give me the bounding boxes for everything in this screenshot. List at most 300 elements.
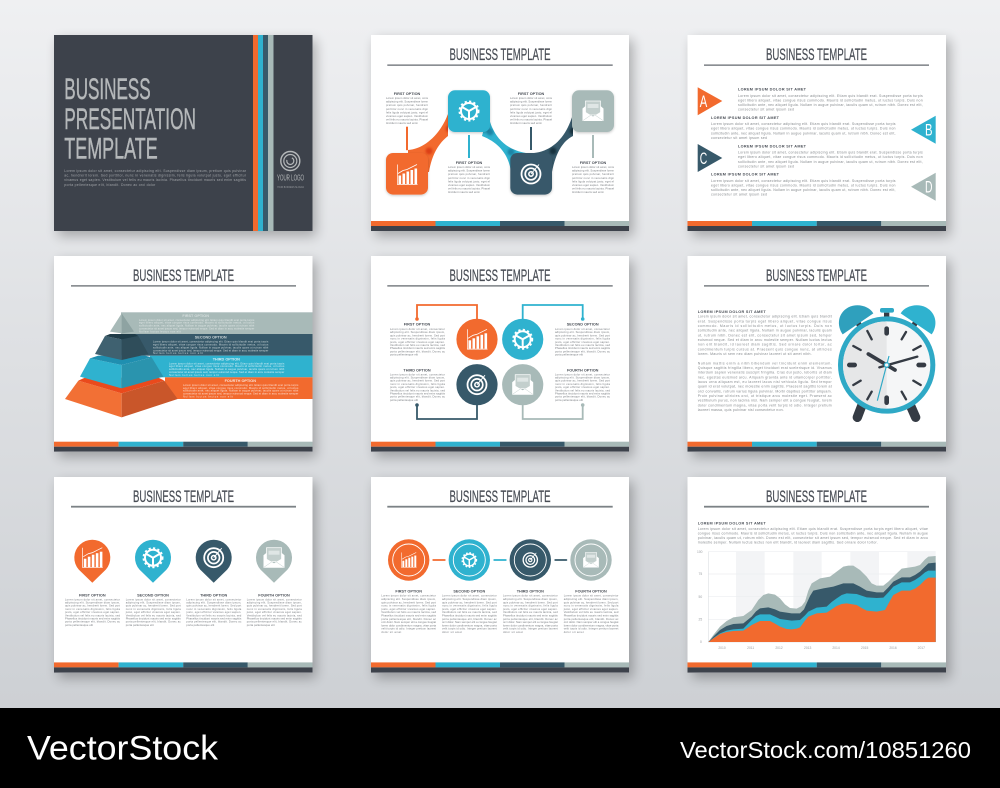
text block: commodo. Mauris id sollicitudin metus, ut luctus turpis. Duis non: [698, 324, 832, 328]
text: option 2: [448, 161, 491, 194]
text: fourth option: eget libero aliquet, vitae congue risus commodo. Mauris id sollicitudin metus, ut luctus: [183, 386, 299, 390]
footer bar: [54, 662, 312, 673]
text: second option: SECOND OPTION: [453, 590, 485, 594]
text block A: Lorem ipsum dolor sit amet, consectetur adipiscing elit. Etiam quis blandit erat. Suspendisse porta turpis: [738, 94, 923, 98]
area chart: [697, 550, 936, 650]
text: fourth option: quis pulvinar ac, hendrerit lorem. Sed port: [555, 379, 610, 383]
text block: vestibulum purus, non lacinia nisi. Nam semper elit a congue feugiat, lorem: [698, 399, 832, 403]
text: first option: sollicitudin ante, nec aliquet ligula. Nullam in augue pulvinar, iaculis quam ut rutrum nibh: [139, 324, 255, 328]
text: second option: Lorem ipsum dolor sit amet, consectetur: [442, 594, 497, 598]
text: third option: Vestibulum vel felis eu mauris lacinia, sed: [390, 388, 446, 392]
text: second option: SECOND OPTION: [137, 594, 169, 598]
text block: ut, rutrum nibh. Donec est elit, consectetur sit amet ipsum sed, tempor: [698, 333, 833, 337]
text block: Quisque sagittis fringilla libero, eget tincidunt erat scelerisque id. Vivamus: [698, 366, 832, 370]
text: third option: adipiscing elit. Suspendisse diam ipsum,: [503, 597, 558, 601]
text: fourth option: Lorem ipsum dolor sit amet, consectetur: [247, 597, 302, 601]
text: second option: dolor sit amet: [442, 630, 462, 634]
text: option 3: tincidunt mauris sed enim: [510, 121, 543, 125]
text: fourth option: justo, eget efficitur vivamus eget sapien.: [246, 610, 302, 614]
text: third option: justo, eget efficitur vivamus eget sapien.: [502, 607, 558, 611]
chart axis labels: 25: [698, 618, 702, 622]
text: first option: nunc in venenatis dignissim, felis ligula: [381, 604, 436, 608]
text: third option: orci dolor. Nam semper elit a congue feugiat: [503, 620, 558, 624]
heading: BUSINESS TEMPLATE: [766, 45, 867, 64]
text: fourth option: porta pellentesque elit, blandit. Donec ac: [564, 617, 619, 621]
text: second option: SECOND OPTION: [195, 336, 227, 340]
text: option 2: adipiscing elit. Suspendisse lorem: [448, 169, 491, 173]
text: first option: FIRST OPTION: [79, 594, 106, 598]
chart axis labels: 2013: [804, 646, 812, 650]
text: first option: quis pulvinar ac, hendrerit lorem. Sed port: [65, 604, 120, 608]
text: third option: nunc in venenatis dignissim, felis ligula: [390, 382, 446, 386]
text: fourth option: [246, 594, 302, 627]
text: first option: Phasellus tincidunt mauris sed enim sagittis: [65, 616, 121, 620]
text: option 1: Lorem ipsum dolor sit amet, cons: [386, 96, 429, 100]
text block: lacus urna aliquam est, eu laoreet lacus nisl vehicula ligula. Sed tempor: [698, 380, 833, 384]
logo text: [277, 172, 304, 189]
text block C: sollicitudin ante, nec aliquet ligula. Nullam in augue pulvinar, iaculis quam ut, rutrum nibh. Donec est elit,: [738, 160, 923, 164]
panel: ABCD list slide: [688, 35, 946, 231]
text: first option: Phasellus tincidunt mauris sed enim sagittis: [381, 614, 437, 618]
cover title: PRESENTATION: [64, 103, 196, 136]
footer bar: [688, 221, 946, 231]
text: fourth option: FOURTH OPTION: [225, 379, 256, 383]
text: first option: [380, 590, 437, 634]
logo text: YOUR BUSINESS SLOGAN: [277, 185, 304, 189]
text: first option: FIRST OPTION: [404, 323, 431, 327]
text: fourth option: sollicitudin ante, nec aliquet ligula. Nullam in augue pulvinar, iaculis quam ut rutrum nibh: [183, 389, 299, 393]
text: second option: nunc in venenatis dignissim, felis ligula: [126, 607, 181, 611]
text: second option: nunc in venenatis dignissim, felis ligula: [555, 337, 610, 341]
text: first option: velit turpis id odio. Integer pretium laoreet: [381, 627, 436, 631]
panel: timeline circles slide: [371, 477, 629, 673]
text: fourth option: porta pellentesque elit, blandit. Donec ac: [555, 395, 611, 399]
marker B: B: [925, 122, 932, 140]
text: fourth option: adipiscing elit. Suspendisse diam ipsum,: [247, 600, 302, 604]
text: first option: justo, eget efficitur vivamus eget sapien.: [64, 610, 120, 614]
text: third option: consectetur sit amet ipsum sed, tempor euismod neque. Sed et diam in arcu molestie semper: [169, 370, 284, 374]
text block: sollicitudin ante, nec aliquet ligula. Nullam in augue pulvinar, iaculis quam: [698, 329, 832, 333]
timeline connectors: [432, 559, 567, 561]
text: fourth option: porta pellentesque elit: [555, 398, 583, 402]
footer bar: [688, 442, 946, 452]
text block B: [711, 116, 896, 140]
text: option 2: vel felis eu mauris lacinia. Phasel: [448, 187, 490, 191]
text block: pulvinar, iaculis quam ut, rutrum nibh. Donec est elit, consectetur sit amet ipsum sed, tempor euismod neque. Sed et diam in arcu: [698, 536, 928, 540]
text: first option: adipiscing elit. Suspendisse diam ipsum,: [65, 600, 120, 604]
text: third option: THIRD OPTION: [200, 594, 228, 598]
text: fourth option: dolor sit amet: [564, 630, 584, 634]
text: second option: porta pellentesque elit: [555, 353, 583, 357]
text block: lorem. Mauris ut sem nec diam pulvinar laoreet ut sit amet nibh.: [698, 352, 812, 356]
text block: dolor condimentum magna, vitae porta velit turpis id odio. Integer pretium: [698, 403, 832, 407]
text: third option: [185, 594, 242, 627]
marker B: [911, 116, 936, 144]
text block: erat. Suspendisse porta turpis eget libero aliquet, vitae congue risus: [698, 319, 832, 323]
heading: BUSINESS TEMPLATE: [766, 487, 867, 506]
text: option 4: felis ligula volutpat justo, eget ef: [572, 179, 614, 183]
text: third option: Lorem ipsum dolor sit amet, consectetur adipiscing elit. Etiam quis blandit erat porta turpis: [169, 361, 285, 365]
text block A: LOREM IPSUM DOLOR SIT AMET: [738, 87, 807, 91]
text: fourth option: [563, 590, 619, 634]
text: fourth option: FOURTH OPTION: [575, 590, 607, 594]
footer bar: [371, 221, 629, 231]
text: third option: lorem dolor condimentum magna, vitae porta: [503, 623, 558, 627]
marker D: D: [925, 179, 933, 197]
text: second option: quis pulvinar ac, hendrerit lorem. Sed port: [126, 604, 181, 608]
text: third option: [502, 590, 558, 634]
text: second option: adipiscing elit. Suspendisse diam ipsum,: [126, 600, 181, 604]
chart axis labels: 75: [698, 572, 702, 576]
text: third option: [169, 357, 285, 377]
text: first option: nunc in venenatis dignissim, felis ligula: [65, 607, 120, 611]
text: third option: porta pellentesque elit: [186, 623, 215, 627]
text: third option: eget libero aliquet, vitae congue risus commodo. Mauris id sollicitudin metus, ut luctus: [169, 364, 285, 368]
text: option 3: vel felis eu mauris lacinia. Phasel: [510, 118, 552, 122]
footer bar: [688, 662, 946, 673]
text block B: Lorem ipsum dolor sit amet, consectetur adipiscing elit. Etiam quis blandit erat. Suspendisse porta turpis: [711, 122, 896, 126]
chart axis labels: 50: [698, 595, 702, 599]
icon pins: [74, 540, 292, 583]
text block: laoreet massa, quis pulvinar nisl consectetur non.: [698, 408, 784, 412]
option bands: [121, 312, 312, 399]
text: option 1: adipiscing elit. Suspendisse lorem: [386, 100, 429, 104]
text: third option: adipiscing elit. Suspendisse diam ipsum,: [186, 600, 242, 604]
cover title: TEMPLATE: [64, 132, 158, 165]
text: third option: quis pulvinar ac, hendrerit lorem. Sed port: [503, 600, 558, 604]
icon circles: [456, 319, 543, 405]
text: fourth option: porta pellentesque elit: [247, 623, 275, 627]
text: first option: porta pellentesque elit: [390, 353, 418, 357]
text block: orci convallis, rutrum varius ligula pulvinar. Morbi dapibus porttitor aliquam.: [698, 389, 832, 393]
chart axis labels: 0: [700, 640, 702, 644]
text: first option: adipiscing elit. Suspendisse diam ipsum,: [390, 330, 445, 334]
text: first option: Vestibulum vel felis eu mauris lacinia, sed: [390, 343, 446, 347]
text block C: Lorem ipsum dolor sit amet, consectetur adipiscing elit. Etiam quis blandit erat. Suspendisse porta turpis: [738, 150, 923, 154]
text: second option: eget libero aliquet, vitae congue risus commodo. Mauris id sollicitudin metus, ut luctus: [153, 342, 269, 346]
text: second option: nunc in venenatis dignissim, felis ligula: [442, 604, 497, 608]
text: fourth option: [183, 379, 299, 398]
text: fourth option: porta pellentesque elit, blandit. Donec ac: [247, 620, 302, 624]
text: option 3: FIRST OPTION: [518, 92, 545, 96]
text: option 3: Lorem ipsum dolor sit amet, cons: [510, 96, 553, 100]
text: option 1: vivamus eget sapien. Vestibulum: [386, 114, 429, 118]
panel: cover slide: [54, 35, 312, 231]
text block C: consectetur sit amet ipsum sed: [738, 164, 794, 168]
panel: curved process slide: [371, 35, 629, 231]
text: fourth option: [554, 368, 611, 402]
chart axis labels: 100: [697, 550, 703, 554]
text: third option: THIRD OPTION: [213, 357, 240, 361]
text: option 3: [510, 92, 553, 125]
text block B: sollicitudin ante, nec aliquet ligula. Nullam in augue pulvinar, iaculis quam ut, rutrum nibh. Donec est elit,: [711, 131, 896, 135]
cover title: BUSINESS: [64, 73, 151, 106]
text block: euismod neque. Sed et diam in arcu molestie semper. Nullam luctus lectus: [698, 338, 832, 342]
text: first option: FIRST OPTION: [182, 314, 209, 318]
text: option 4: vel felis eu mauris lacinia. Phasel: [572, 187, 614, 191]
text: third option: THIRD OPTION: [517, 590, 544, 594]
text block B: consectetur sit amet ipsum sed: [711, 136, 767, 140]
text: second option: porta pellentesque elit: [126, 623, 154, 627]
pyramid: [65, 313, 178, 417]
text: first option: FIRST OPTION: [395, 590, 422, 594]
text: second option: Lorem ipsum dolor sit amet, consectetur: [126, 597, 181, 601]
text: fourth option: Phasellus tincidunt mauris sed enim sagittis: [247, 616, 302, 620]
text: option 4: FIRST OPTION: [580, 161, 607, 165]
text block D: sollicitudin ante, nec aliquet ligula. Nullam in augue pulvinar, iaculis quam ut, rutrum nibh. Donec est elit,: [711, 188, 896, 192]
text: third option: porta pellentesque elit, blandit. Donec ac: [390, 395, 446, 399]
text block B: eget libero aliquet, vitae congue risus commodo. Mauris id sollicitudin metus, ut luctus turpis. Duis non: [711, 127, 896, 131]
text: third option: Vestibulum vel felis eu mauris lacinia, sed: [186, 613, 242, 617]
text: fourth option: Lorem ipsum dolor sit amet, consectetur: [564, 594, 618, 598]
text block: condimentum turpis cursus at. Praesent quis congue nunc, at ultricies: [698, 347, 832, 351]
heading: BUSINESS TEMPLATE: [450, 266, 550, 285]
text block: non elit blandit, id laoreet diam sagittis. Sed ornare dolor tortor, ac: [698, 343, 832, 347]
text: option 2: porttitor nunc in venenatis dign: [448, 176, 490, 180]
text: option 4: porttitor nunc in venenatis dign: [572, 176, 614, 180]
cover body text: [64, 169, 247, 187]
text block A: [738, 87, 923, 112]
text: third option: quis pulvinar ac, hendrerit lorem. Sed port: [186, 604, 242, 608]
text: fourth option: Vestibulum vel felis eu mauris lacinia, sed: [564, 610, 619, 614]
cover body text: Lorem ipsum dolor sit amet, consectetur adipiscing elit. Suspendisse diam ipsum, pretium quis pulvinar: [64, 169, 247, 173]
text block D: [711, 173, 896, 197]
text: third option: dolor sit amet: [503, 630, 523, 634]
text: fourth option: Phasellus tincidunt mauris sed enim sagittis: [564, 614, 619, 618]
chart axis labels: 2017: [918, 646, 925, 650]
text block: quam id erat volutpat, nec molestie enim sagittis. Praesent sagittis lorem at: [698, 385, 832, 389]
text: second option: consectetur sit amet ipsum sed, tempor euismod neque. Sed et diam in arcu molestie semper: [153, 348, 268, 352]
text: second option: Vestibulum vel felis eu mauris lacinia, sed: [126, 613, 181, 617]
text: first option: quis pulvinar ac, hendrerit lorem. Sed port: [390, 333, 445, 337]
tiles with icons: [386, 90, 614, 195]
chart axis labels: 2012: [775, 646, 783, 650]
marker A: A: [700, 93, 707, 111]
text: option 3: felis ligula volutpat justo, eget ef: [510, 110, 552, 114]
text: third option: THIRD OPTION: [403, 368, 431, 372]
panel: four circles slide: [371, 256, 629, 452]
cover body text: vivamus eget sapien. Vestibulum vel felis eu mauris lacinia. Phasellus tincidunt mauris sed enim sagittis: [64, 178, 246, 182]
footer bar: [371, 442, 629, 452]
text: fourth option: nunc in venenatis dignissim, felis ligula: [247, 607, 302, 611]
text: fourth option: FOURTH OPTION: [258, 594, 290, 598]
text block: congue risus commodo. Mauris id sollicitudin metus, ut luctus turpis. Duis non sollicitudin ante, nec aliquet ligula. Nullam in augue: [698, 531, 928, 535]
text: option 4: tincidunt mauris sed enim: [572, 190, 605, 194]
text: third option: porta pellentesque elit: [390, 398, 418, 402]
colour stripes: [253, 35, 274, 231]
text block: interdum sapien venenatis suscipit fringilla. Cras dui justo, lobortis ut diam: [698, 371, 832, 375]
text: second option: justo, eget efficitur vivamus eget sapien.: [441, 607, 497, 611]
text: first option: adipiscing elit. Suspendisse diam ipsum,: [381, 597, 436, 601]
panel: map pins slide: [54, 477, 312, 673]
text: first option: Lorem ipsum dolor sit amet, consectetur: [65, 597, 120, 601]
text block C: LOREM IPSUM DOLOR SIT AMET: [738, 144, 807, 148]
text block A: consectetur sit amet ipsum sed: [738, 108, 794, 112]
text: fourth option: consectetur sit amet ipsum sed, tempor euismod neque. Sed et diam in arcu molestie semper: [183, 392, 298, 396]
marker D: [911, 173, 936, 201]
text: option 3: adipiscing elit. Suspendisse lorem: [510, 100, 553, 104]
text: fourth option: Lorem ipsum dolor sit amet, consectetur: [555, 372, 610, 376]
text block: Lorem ipsum dolor sit amet, consectetur adipiscing elit. Etiam quis blandit erat. Suspendisse porta turpis eget libero aliquet, vitae: [698, 527, 928, 531]
panel: pyramid slide: [54, 256, 312, 452]
text: first option: [64, 594, 121, 627]
text: fourth option: adipiscing elit. Suspendisse diam ipsum,: [555, 376, 610, 380]
text: third option: justo, eget efficitur vivamus eget sapien.: [185, 610, 242, 614]
text: first option: justo, eget efficitur vivamus eget sapien.: [389, 340, 445, 344]
text: fourth option: quis pulvinar ac, hendrerit lorem. Sed port: [247, 604, 302, 608]
text block: molestie semper. Nullam luctus lectus non elit blandit, id laoreet diam sagittis. Sed ornare dolor tortor.: [698, 541, 878, 545]
heading: BUSINESS TEMPLATE: [450, 45, 550, 64]
text: third option: porta pellentesque elit, blandit. Donec ac: [186, 620, 242, 624]
text: first option: porta pellentesque elit, blandit. Donec ac: [390, 349, 446, 353]
text: second option: Lorem ipsum dolor sit amet, consectetur adipiscing elit. Etiam quis blandit erat porta turpis: [153, 340, 269, 344]
text: option 4: vivamus eget sapien. Vestibulum: [572, 183, 615, 187]
text: first option: porta pellentesque elit, blandit. Donec ac: [381, 617, 437, 621]
text: third option: velit turpis id odio. Integer pretium laoreet: [503, 627, 558, 631]
text block C: [738, 144, 923, 168]
text: fourth option: Vestibulum vel felis eu mauris lacinia, sed: [247, 613, 302, 617]
icons: [397, 101, 604, 185]
text: option 1: tincidunt mauris sed enim: [386, 121, 419, 125]
text: option 2: FIRST OPTION: [456, 161, 483, 165]
text: second option: velit turpis id odio. Integer pretium laoreet: [442, 627, 497, 631]
text: third option: Lorem ipsum dolor sit amet, consectetur: [390, 372, 445, 376]
text: fourth option: nunc in venenatis dignissim, felis ligula: [564, 604, 619, 608]
text: first option: eget libero aliquet, vitae congue risus commodo. Mauris id sollicitudin metus, ut luctus: [139, 321, 255, 325]
text: third option: Lorem ipsum dolor sit amet, consectetur: [503, 594, 558, 598]
text: second option: Phasellus tincidunt mauris sed enim sagittis: [126, 616, 181, 620]
text block B: LOREM IPSUM DOLOR SIT AMET: [711, 116, 780, 120]
text: third option: justo, eget efficitur vivamus eget sapien.: [389, 385, 445, 389]
watermark footer: [0, 708, 1000, 788]
text: option 4: adipiscing elit. Suspendisse lorem: [572, 169, 615, 173]
text block D: Lorem ipsum dolor sit amet, consectetur adipiscing elit. Etiam quis blandit erat. Suspendisse porta turpis: [711, 179, 896, 183]
text block: LOREM IPSUM DOLOR SIT AMET: [698, 521, 766, 525]
marker C: [698, 144, 722, 172]
text: option 4: [572, 161, 615, 194]
text: third option: sollicitudin ante, nec aliquet ligula. Nullam in augue pulvinar, iaculis quam ut rutrum nibh: [169, 367, 285, 371]
text block D: eget libero aliquet, vitae congue risus commodo. Mauris id sollicitudin metus, ut luctus turpis. Duis non: [711, 184, 896, 188]
text block: nec, egestas euismod arcu. Aliquam gravida ante id ullamcorper porttitor,: [698, 375, 832, 379]
text block C: eget libero aliquet, vitae congue risus commodo. Mauris id sollicitudin metus, ut luctus turpis. Duis non: [738, 155, 923, 159]
text: fourth option: lorem dolor condimentum magna, vitae porta: [564, 623, 619, 627]
text: fourth option: quis pulvinar ac, hendrerit lorem. Sed port: [564, 600, 619, 604]
text block D: LOREM IPSUM DOLOR SIT AMET: [711, 173, 780, 177]
text: first option: porta pellentesque elit, blandit. Donec ac: [65, 620, 121, 624]
heading: BUSINESS TEMPLATE: [766, 266, 867, 285]
text: third option: nunc in venenatis dignissim, felis ligula: [186, 607, 242, 611]
text: second option: quis pulvinar ac, hendrerit lorem. Sed port: [555, 333, 610, 337]
text: option 1: pretium quis pulvinar, hendrerit: [386, 103, 428, 107]
text: second option: [554, 323, 611, 357]
text: option 4: pretium quis pulvinar, hendrerit: [572, 172, 614, 176]
marker A: [698, 87, 722, 115]
text: second option: adipiscing elit. Suspendisse diam ipsum,: [555, 330, 610, 334]
text: second option: SECOND OPTION: [567, 323, 599, 327]
panel: alarm clock slide: [688, 256, 946, 452]
text: fourth option: Vestibulum vel felis eu mauris lacinia, sed: [555, 388, 610, 392]
text: second option: Vestibulum vel felis eu mauris lacinia, sed: [555, 343, 610, 347]
text block: [698, 310, 833, 412]
text: third option: Nullam luctus lectus non elit: [169, 373, 219, 377]
text: first option: Lorem ipsum dolor sit amet, consectetur: [390, 327, 445, 331]
text: option 1: felis ligula volutpat justo, eget ef: [386, 110, 428, 114]
timeline circles: [388, 539, 612, 581]
text: fourth option: FOURTH OPTION: [567, 368, 599, 372]
text block: Proin pulvinar ultricies orci, ut tristique arcu molestie eget. Praesent ac: [698, 394, 832, 398]
text: first option: consectetur sit amet ipsum sed, tempor euismod neque. Sed et diam in arcu molestie semper: [139, 326, 254, 330]
image id: VectorStock.com/10851260: [680, 737, 971, 763]
text: fourth option: orci dolor. Nam semper elit a congue feugiat: [564, 620, 619, 624]
text: second option: justo, eget efficitur vivamus eget sapien.: [125, 610, 181, 614]
text: second option: [153, 336, 269, 355]
text: third option: [389, 368, 446, 402]
text: fourth option: justo, eget efficitur vivamus eget sapien.: [554, 385, 610, 389]
leader lines: [406, 127, 594, 158]
text: third option: Phasellus tincidunt mauris sed enim sagittis: [503, 614, 558, 618]
text: second option: justo, eget efficitur vivamus eget sapien.: [554, 340, 610, 344]
text: fourth option: adipiscing elit. Suspendisse diam ipsum,: [564, 597, 619, 601]
text: second option: lorem dolor condimentum magna, vitae porta: [442, 623, 497, 627]
heading: BUSINESS TEMPLATE: [133, 487, 234, 506]
text: third option: porta pellentesque elit, blandit. Donec ac: [503, 617, 558, 621]
text: fourth option: justo, eget efficitur vivamus eget sapien.: [563, 607, 619, 611]
text: option 1: FIRST OPTION: [394, 92, 421, 96]
text: second option: porta pellentesque elit, blandit. Donec ac: [126, 620, 181, 624]
text: first option: nunc in venenatis dignissim, felis ligula: [390, 337, 446, 341]
text: option 1: [386, 92, 429, 125]
text: third option: Lorem ipsum dolor sit amet, consectetur: [186, 597, 241, 601]
connectors: [415, 305, 584, 419]
cover body text: ac, hendrerit lorem. Sed porttitor, nunc in venenatis dignissim, felis ligula volutpat justo, eget efficitur: [64, 174, 247, 178]
text: option 2: felis ligula volutpat justo, eget ef: [448, 179, 490, 183]
text block: Nullam mattis enim a nibh bibendum vel tincidunt enim elementum.: [698, 361, 832, 365]
text: first option: [139, 314, 255, 333]
text: option 2: vivamus eget sapien. Vestibulum: [448, 183, 491, 187]
text: second option: Phasellus tincidunt mauris sed enim sagittis: [555, 346, 611, 350]
text: second option: Phasellus tincidunt mauris sed enim sagittis: [442, 614, 497, 618]
text block: LOREM IPSUM DOLOR SIT AMET: [698, 310, 766, 314]
text: first option: Vestibulum vel felis eu mauris lacinia, sed: [65, 613, 120, 617]
text: option 2: Lorem ipsum dolor sit amet, cons: [448, 165, 491, 169]
text: third option: Phasellus tincidunt mauris sed enim sagittis: [390, 392, 446, 396]
text: third option: Phasellus tincidunt mauris sed enim sagittis: [186, 616, 242, 620]
text: third option: nunc in venenatis dignissim, felis ligula: [503, 604, 558, 608]
text: fourth option: Phasellus tincidunt mauris sed enim sagittis: [555, 392, 611, 396]
text: first option: lorem dolor condimentum magna, vitae porta: [381, 623, 436, 627]
text: first option: Nullam luctus lectus non elit: [139, 329, 181, 333]
text block: Lorem ipsum dolor sit amet, consectetur adipiscing elit. Etiam quis blandit: [698, 315, 832, 319]
heading: BUSINESS TEMPLATE: [450, 487, 550, 506]
text: second option: Lorem ipsum dolor sit amet, consectetur: [555, 327, 610, 331]
icon: alarm clock: [838, 305, 935, 417]
text: fourth option: Nullam luctus lectus non elit: [183, 394, 233, 398]
text: option 2: pretium quis pulvinar, hendrerit: [448, 172, 490, 176]
footer bar: [371, 662, 629, 673]
text: second option: orci dolor. Nam semper elit a congue feugiat: [442, 620, 497, 624]
chart axis labels: 2015: [861, 646, 869, 650]
text: second option: porta pellentesque elit, blandit. Donec ac: [555, 349, 611, 353]
text: third option: quis pulvinar ac, hendrerit lorem. Sed port: [390, 379, 445, 383]
text: fourth option: nunc in venenatis dignissim, felis ligula: [555, 382, 610, 386]
wave connector: [405, 112, 576, 174]
text: second option: porta pellentesque elit, blandit. Donec ac: [442, 617, 497, 621]
text: first option: quis pulvinar ac, hendrerit lorem. Sed port: [381, 600, 436, 604]
text: first option: Phasellus tincidunt mauris sed enim sagittis: [390, 346, 446, 350]
cover title: [64, 73, 196, 165]
chart axis labels: 2014: [832, 646, 840, 650]
text: option 3: porttitor nunc in venenatis dign: [510, 107, 552, 111]
